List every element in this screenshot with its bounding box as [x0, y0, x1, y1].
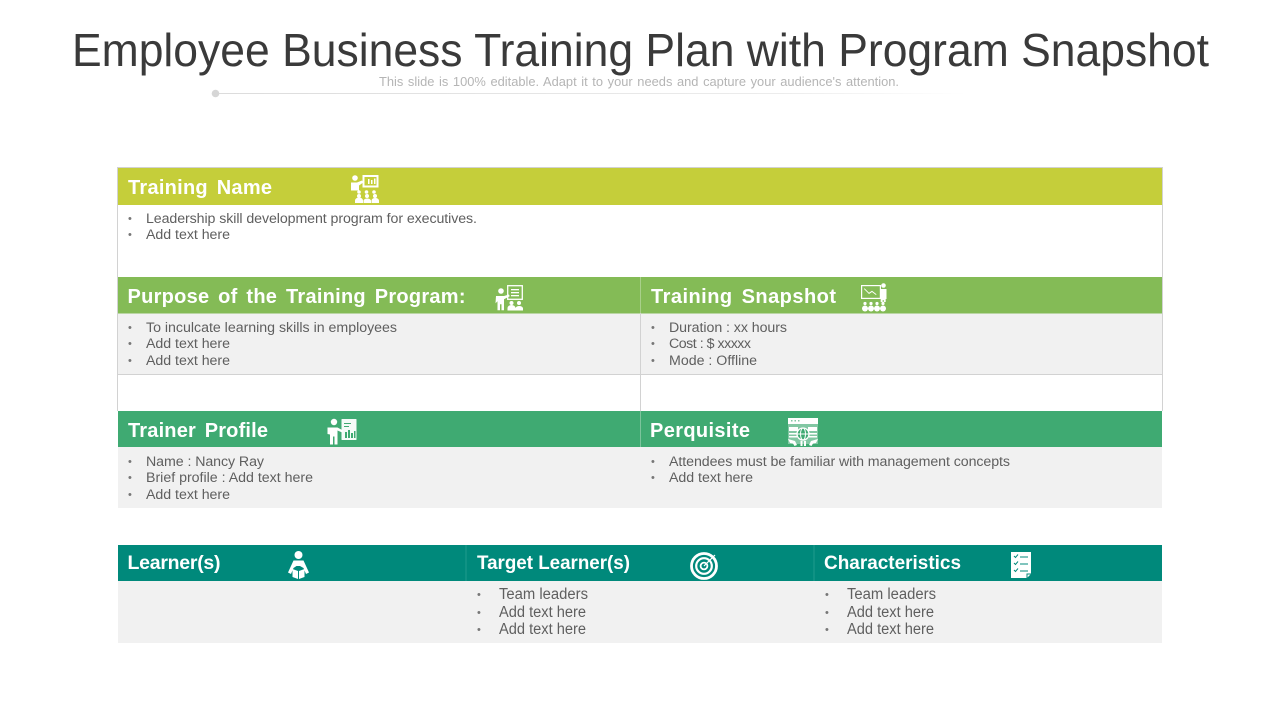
list: target learners: Add text here [499, 621, 586, 638]
list: perquisite: Add text here [669, 470, 753, 486]
list: trainer: • [128, 456, 132, 468]
icon: reader [288, 551, 309, 579]
list: characteristics: Add text here [847, 604, 934, 621]
heading: training name: Training Name [128, 177, 272, 199]
list: trainer: Brief profile : Add text here [146, 470, 313, 486]
header band: training name [118, 168, 1162, 205]
icon: presenter with chart [862, 283, 886, 312]
list: trainer: Add text here [146, 487, 230, 503]
title: Employee Business Training Plan with Program Snapshot [72, 24, 1209, 76]
header band: learners [118, 545, 466, 581]
list: characteristics: Add text here [847, 621, 934, 638]
heading: perquisite: Perquisite [650, 420, 750, 442]
list: purpose: • [128, 322, 132, 334]
header band: perquisite [640, 411, 1162, 447]
list: snapshot: Duration : xx hours [669, 320, 787, 336]
list: training name: Leadership skill development program for executives. [146, 211, 477, 227]
list: perquisite: • [651, 472, 655, 484]
subtitle: This slide is 100% editable. Adapt it to your needs and capture your audience's attention. [379, 75, 899, 89]
list: perquisite: Attendees must be familiar with management concepts [669, 454, 1010, 470]
icon: presenter with board [496, 286, 523, 310]
list: target learners: • [477, 624, 481, 636]
list: target learners: • [477, 589, 481, 601]
panel: purpose of the training program [118, 277, 640, 374]
list: training name: Add text here [146, 227, 230, 243]
panel: target learners [466, 545, 814, 643]
icon: checklist [1011, 552, 1031, 578]
list: trainer: • [128, 489, 132, 501]
list: perquisite: • [651, 456, 655, 468]
table rules [117, 167, 1163, 447]
panel: perquisite [640, 411, 1162, 508]
header band: trainer [118, 411, 640, 447]
panel: characteristics [814, 545, 1162, 643]
list: purpose: Add text here [146, 336, 230, 352]
heading: snapshot: Training Snapshot [651, 286, 836, 308]
list: target learners: Add text here [499, 604, 586, 621]
icon: trainer with class [351, 175, 379, 203]
heading: characteristics: Characteristics [824, 552, 961, 574]
list: training name: • [128, 213, 132, 225]
panel: training name [118, 168, 1162, 277]
header band: snapshot [640, 277, 1162, 314]
header band: target learners [466, 545, 814, 581]
panel: learners [118, 545, 466, 643]
list: trainer: • [128, 472, 132, 484]
list: target learners: Team leaders [499, 586, 588, 603]
lower table dividers [466, 545, 814, 581]
header band: purpose [118, 277, 640, 314]
panel: trainer profile [118, 411, 640, 508]
list: characteristics [825, 586, 936, 638]
icon: target [692, 554, 716, 578]
list: training name: • [128, 229, 132, 241]
list: snapshot: Mode : Offline [669, 353, 757, 369]
header band: characteristics [814, 545, 1162, 581]
list: purpose: To inculcate learning skills in employees [146, 320, 397, 336]
list: purpose: • [128, 355, 132, 367]
list: target learners [477, 586, 588, 638]
heading: purpose: Purpose of the Training Program: [128, 286, 466, 308]
list: snapshot [651, 320, 787, 369]
list: purpose: • [128, 338, 132, 350]
icon: web conference [788, 418, 818, 446]
list: snapshot: Cost : $ xxxxx [669, 336, 751, 352]
list: snapshot: • [651, 338, 655, 350]
list: trainer: Name : Nancy Ray [146, 454, 265, 470]
heading: learners: Learner(s) [128, 552, 220, 574]
icon: trainer with chart board [328, 419, 356, 444]
heading: trainer: Trainer Profile [128, 420, 268, 442]
list: characteristics: • [825, 589, 829, 601]
list: training name [128, 211, 477, 243]
list: characteristics: Team leaders [847, 586, 936, 603]
list: snapshot: • [651, 355, 655, 367]
title rule with dot [212, 90, 966, 97]
list: purpose: Add text here [146, 353, 230, 369]
list: trainer [128, 454, 313, 503]
list: characteristics: • [825, 624, 829, 636]
list: perquisite [651, 454, 1010, 486]
list: snapshot: • [651, 322, 655, 334]
list: target learners: • [477, 607, 481, 619]
list: purpose [128, 320, 397, 369]
heading: target learners: Target Learner(s) [477, 552, 630, 574]
list: characteristics: • [825, 607, 829, 619]
panel: training snapshot [640, 277, 1162, 374]
